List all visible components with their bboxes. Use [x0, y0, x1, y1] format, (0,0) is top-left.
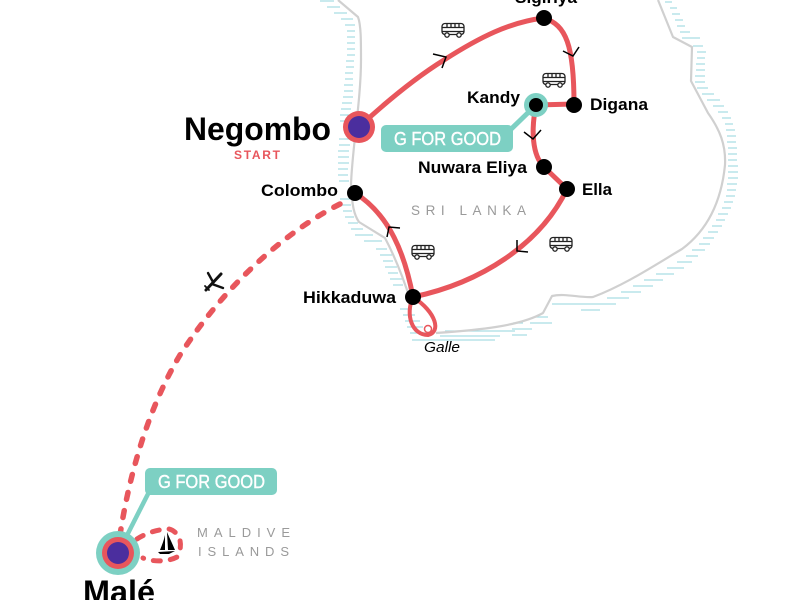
flight route: Colombo to Malé — [120, 204, 340, 535]
arrow: toward Sigiriya — [433, 54, 446, 68]
label: Ella: Ella — [582, 180, 613, 199]
label: Hikkaduwa: Hikkaduwa — [303, 288, 397, 307]
arrow: toward Digana — [563, 47, 579, 56]
marker: Kandy — [524, 93, 548, 117]
label: Colombo: Colombo — [261, 181, 338, 200]
icon: bus 4 — [550, 238, 572, 251]
marker: Sigiriya — [536, 10, 552, 26]
arrow: toward Colombo — [387, 227, 400, 237]
label: Negombo: Negombo — [184, 111, 331, 147]
arrow: toward Nuwara Eliya — [524, 130, 541, 139]
marker: Nuwara Eliya — [536, 159, 552, 175]
label: Maldive Islands: ISLANDS — [198, 544, 289, 559]
marker: Colombo — [347, 185, 363, 201]
route: Sigiriya to Digana — [544, 18, 574, 104]
sea hatching — [320, 1, 738, 340]
callout: G for Good Kandy: G FOR GOOD — [394, 129, 501, 149]
route: Ella to Hikkaduwa — [413, 189, 567, 297]
marker: Malé — [96, 531, 140, 575]
coastline of Sri Lanka — [338, 0, 725, 333]
route: Hikkaduwa to Galle loop — [410, 297, 435, 335]
label: Kandy: Kandy — [467, 88, 521, 107]
sailing route around Maldives — [137, 529, 180, 561]
route: Kandy to Ella — [533, 105, 567, 189]
label: Digana: Digana — [590, 95, 649, 114]
leader: G for Good Kandy — [505, 105, 536, 135]
route: Negombo to Sigiriya — [359, 18, 544, 127]
route: Digana to Kandy — [536, 104, 574, 105]
label: Galle: Galle — [424, 339, 460, 356]
label: Nuwara Eliya: Nuwara Eliya — [418, 158, 528, 177]
marker: Negombo start — [343, 111, 375, 143]
callout: G for Good Malé: G FOR GOOD — [158, 472, 265, 492]
route: Hikkaduwa to Colombo — [355, 193, 413, 297]
marker: Digana — [566, 97, 582, 113]
label: Maldive Islands — [197, 525, 290, 559]
icon: bus 1 — [442, 24, 464, 37]
callout: G for Good Kandy — [381, 125, 513, 152]
label: START: START — [234, 148, 281, 162]
icon: plane — [205, 273, 223, 290]
arrow: toward Hikkaduwa — [517, 240, 528, 252]
icon: bus 2 — [543, 74, 565, 87]
marker: Ella — [559, 181, 575, 197]
Galle stop marker — [424, 326, 432, 332]
icon: sailboat — [158, 532, 175, 554]
label: Maldive Islands: MALDIVE — [197, 525, 290, 540]
marker: Hikkaduwa — [405, 289, 421, 305]
label: Sri Lanka: SRI LANKA — [411, 203, 526, 218]
callout: G for Good Malé — [145, 468, 277, 495]
icon: bus 3 — [412, 246, 434, 259]
leader: G for Good Malé — [118, 490, 150, 553]
